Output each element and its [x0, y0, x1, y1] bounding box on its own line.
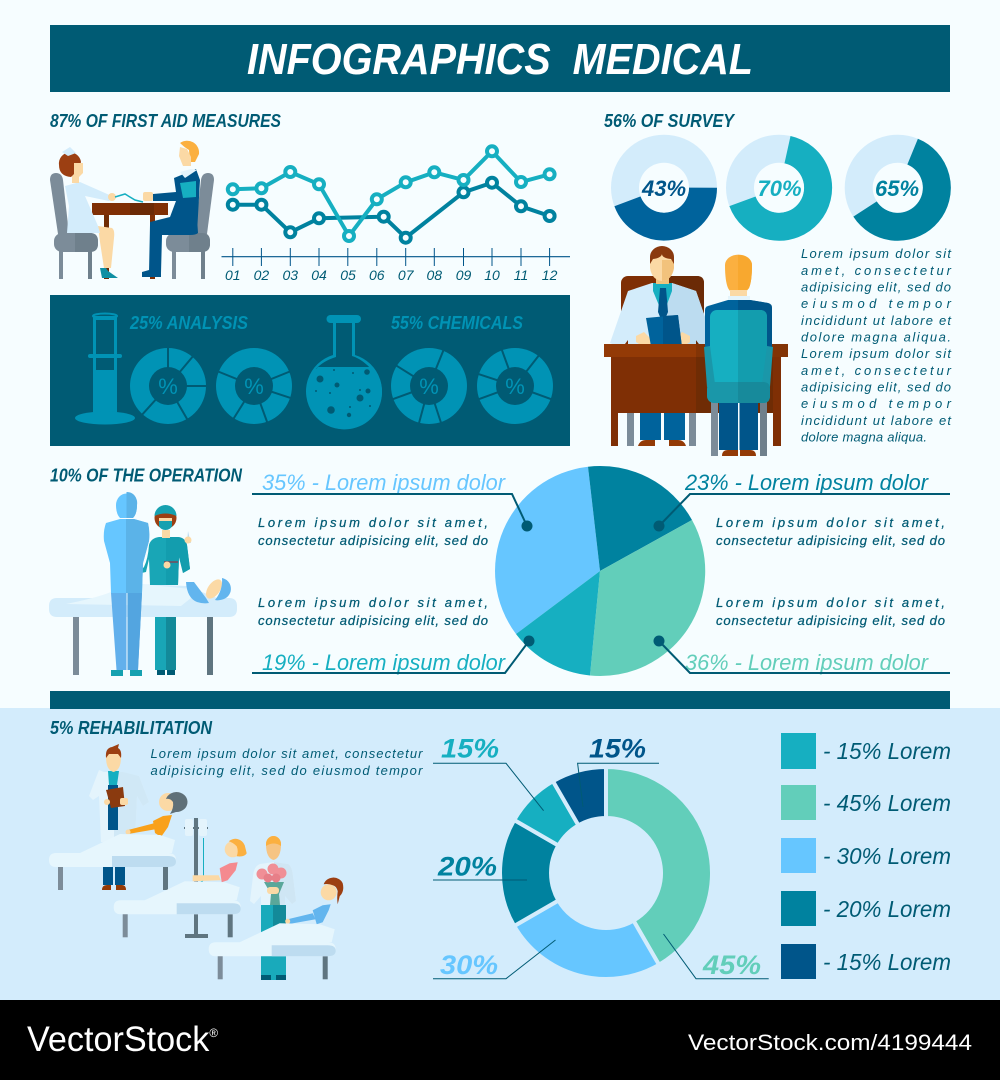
month labels: 09 [456, 267, 471, 283]
chart: survey ring 65 percent: 65% [875, 176, 919, 201]
legend: - 15% Lorem [823, 738, 951, 764]
chart: rehabilitation donut [500, 767, 712, 979]
legend: - 30% Lorem [823, 843, 951, 869]
figure: doctor with clipboard [89, 744, 149, 890]
month labels: 12 [542, 267, 558, 283]
callout: 35 percent: 35% - Lorem ipsum dolor [262, 470, 507, 495]
footer: watermark bar: VectorStock.com/4199444 [688, 1030, 972, 1055]
chart: chemicals ring two: % [505, 374, 525, 399]
legend [781, 733, 951, 979]
text block: survey description: adipisicing elit, sed do [801, 280, 951, 294]
footer: watermark bar [0, 1000, 1000, 1080]
month labels: 04 [311, 267, 327, 283]
legend: - 20% Lorem [823, 896, 951, 922]
dark series [228, 178, 555, 243]
footer: watermark bar: VectorStock [27, 1020, 214, 1059]
month labels: 11 [514, 267, 528, 283]
chart: survey ring 43 percent [611, 135, 717, 241]
text block: left lower: Lorem ipsum dolor sit amet, [258, 595, 488, 610]
chart: analysis ring one: % [158, 374, 178, 399]
text block: survey description: dolore magna aliqua. [801, 330, 951, 344]
text block: right upper [716, 515, 945, 548]
panel: analysis and chemicals [50, 295, 570, 446]
legend: - 15% Lorem [823, 949, 951, 975]
month labels: 03 [283, 267, 298, 283]
figure: bed one with patient [49, 792, 187, 890]
legend: - 45% Lorem [823, 790, 951, 816]
text block: survey description: adipisicing elit, sed do [801, 380, 951, 394]
callout: donut 20 percent: 20% [437, 852, 497, 882]
text block: survey description: amet, consectetur [801, 363, 952, 378]
figure: IV stand [184, 818, 208, 938]
text block: survey description: incididunt ut labore et [801, 313, 952, 328]
text block: left upper: consectetur adipisicing elit, sed do [258, 533, 488, 548]
month labels [225, 267, 558, 283]
illustration: rehabilitation ward [49, 744, 343, 980]
light series [228, 146, 555, 241]
chart: analysis ring two [216, 348, 292, 424]
text block: survey description: amet, consectetur [801, 263, 952, 278]
chart: survey ring 70 percent: 70% [758, 176, 802, 201]
text block: right upper: Lorem ipsum dolor sit amet, [716, 515, 945, 530]
text block: rehabilitation [150, 746, 423, 778]
chart: main pie [495, 466, 705, 676]
chart: analysis ring one [130, 346, 208, 424]
callout: donut 15 percent teal [433, 734, 544, 811]
figure: bed three with patient [209, 878, 343, 979]
callout: donut 20 percent [433, 852, 527, 882]
callout: 23 percent: 23% - Lorem ipsum dolor [684, 470, 930, 495]
callout: donut 45 percent: 45% [702, 950, 761, 980]
callout: donut 15 percent navy [578, 734, 659, 807]
chart: chemicals ring two [477, 348, 553, 424]
heading: operation: 10% OF THE OPERATION [50, 466, 243, 486]
text block: right lower [716, 595, 945, 628]
month labels: 01 [225, 267, 241, 283]
illustration: nurse and patient at table [50, 141, 214, 279]
month labels: 06 [369, 267, 385, 283]
icon: flask [306, 315, 382, 429]
heading: analysis: 25% ANALYSIS [129, 313, 248, 333]
callout: donut 15 percent teal: 15% [441, 734, 499, 764]
figure: flower visitor [250, 836, 296, 980]
heading: first aid: 87% OF FIRST AID MEASURES [50, 111, 281, 131]
callout: donut 45 percent [664, 934, 769, 980]
illustration: surgery [49, 492, 237, 676]
text block: survey description: eiusmod tempor [801, 396, 952, 411]
illustration: doctor consultation [604, 246, 788, 456]
text block: left upper: Lorem ipsum dolor sit amet, [258, 515, 488, 530]
text block: left lower: consectetur adipisicing elit, sed do [258, 613, 488, 628]
title banner [50, 25, 950, 92]
chart: survey ring 65 percent [845, 135, 951, 241]
text block: survey description: eiusmod tempor [801, 296, 952, 311]
title banner: INFOGRAPHICS MEDICAL [247, 35, 753, 84]
text block: right lower: Lorem ipsum dolor sit amet, [716, 595, 945, 610]
heading: rehabilitation: 5% REHABILITATION [50, 718, 213, 738]
chart: survey ring 43 percent: 43% [641, 176, 686, 201]
text block: survey description: incididunt ut labore et [801, 413, 952, 428]
month labels: 10 [484, 267, 500, 283]
callout: 23 percent [654, 470, 950, 532]
chart: survey ring 70 percent [726, 135, 832, 241]
text block: rehabilitation: adipisicing elit, sed do eiusmod tempor [150, 763, 423, 778]
line chart: twelve months [222, 146, 570, 283]
footer: watermark bar: ® [209, 1026, 218, 1040]
text block: right upper: consectetur adipisicing elit, sed do [716, 533, 945, 548]
chart: analysis ring two: % [244, 374, 264, 399]
callout: 19 percent [252, 636, 534, 675]
icon: test tube [75, 314, 135, 424]
heading: chemicals: 55% CHEMICALS [391, 313, 523, 333]
month labels: 08 [427, 267, 442, 283]
text block: right lower: consectetur adipisicing elit, sed do [716, 613, 945, 628]
month labels: 07 [398, 267, 415, 283]
text block: survey description: Lorem ipsum dolor sit [801, 346, 952, 361]
callout: 19 percent: 19% - Lorem ipsum dolor [262, 650, 507, 675]
callout: 36 percent [654, 636, 950, 675]
chart: chemicals ring one: % [419, 374, 439, 399]
heading: survey: 56% OF SURVEY [604, 111, 736, 131]
month labels: 02 [254, 267, 269, 283]
callout: 36 percent: 36% - Lorem ipsum dolor [685, 650, 930, 675]
text block: survey description [801, 246, 952, 444]
text block: survey description: Lorem ipsum dolor sit [801, 246, 952, 261]
callout: donut 15 percent navy: 15% [589, 734, 646, 764]
text block: survey description: dolore magna aliqua. [801, 430, 927, 444]
text block: left upper [258, 515, 488, 548]
callout: donut 30 percent: 30% [440, 950, 498, 980]
callout: 35 percent [252, 470, 532, 532]
callout: donut 30 percent [433, 940, 556, 980]
text block: rehabilitation: Lorem ipsum dolor sit amet, consectetur [150, 746, 423, 761]
chart: chemicals ring one [391, 348, 467, 425]
figure: bed two with patient [114, 839, 247, 937]
month labels: 05 [340, 267, 356, 283]
text block: left lower [258, 595, 488, 628]
divider band [50, 691, 950, 709]
